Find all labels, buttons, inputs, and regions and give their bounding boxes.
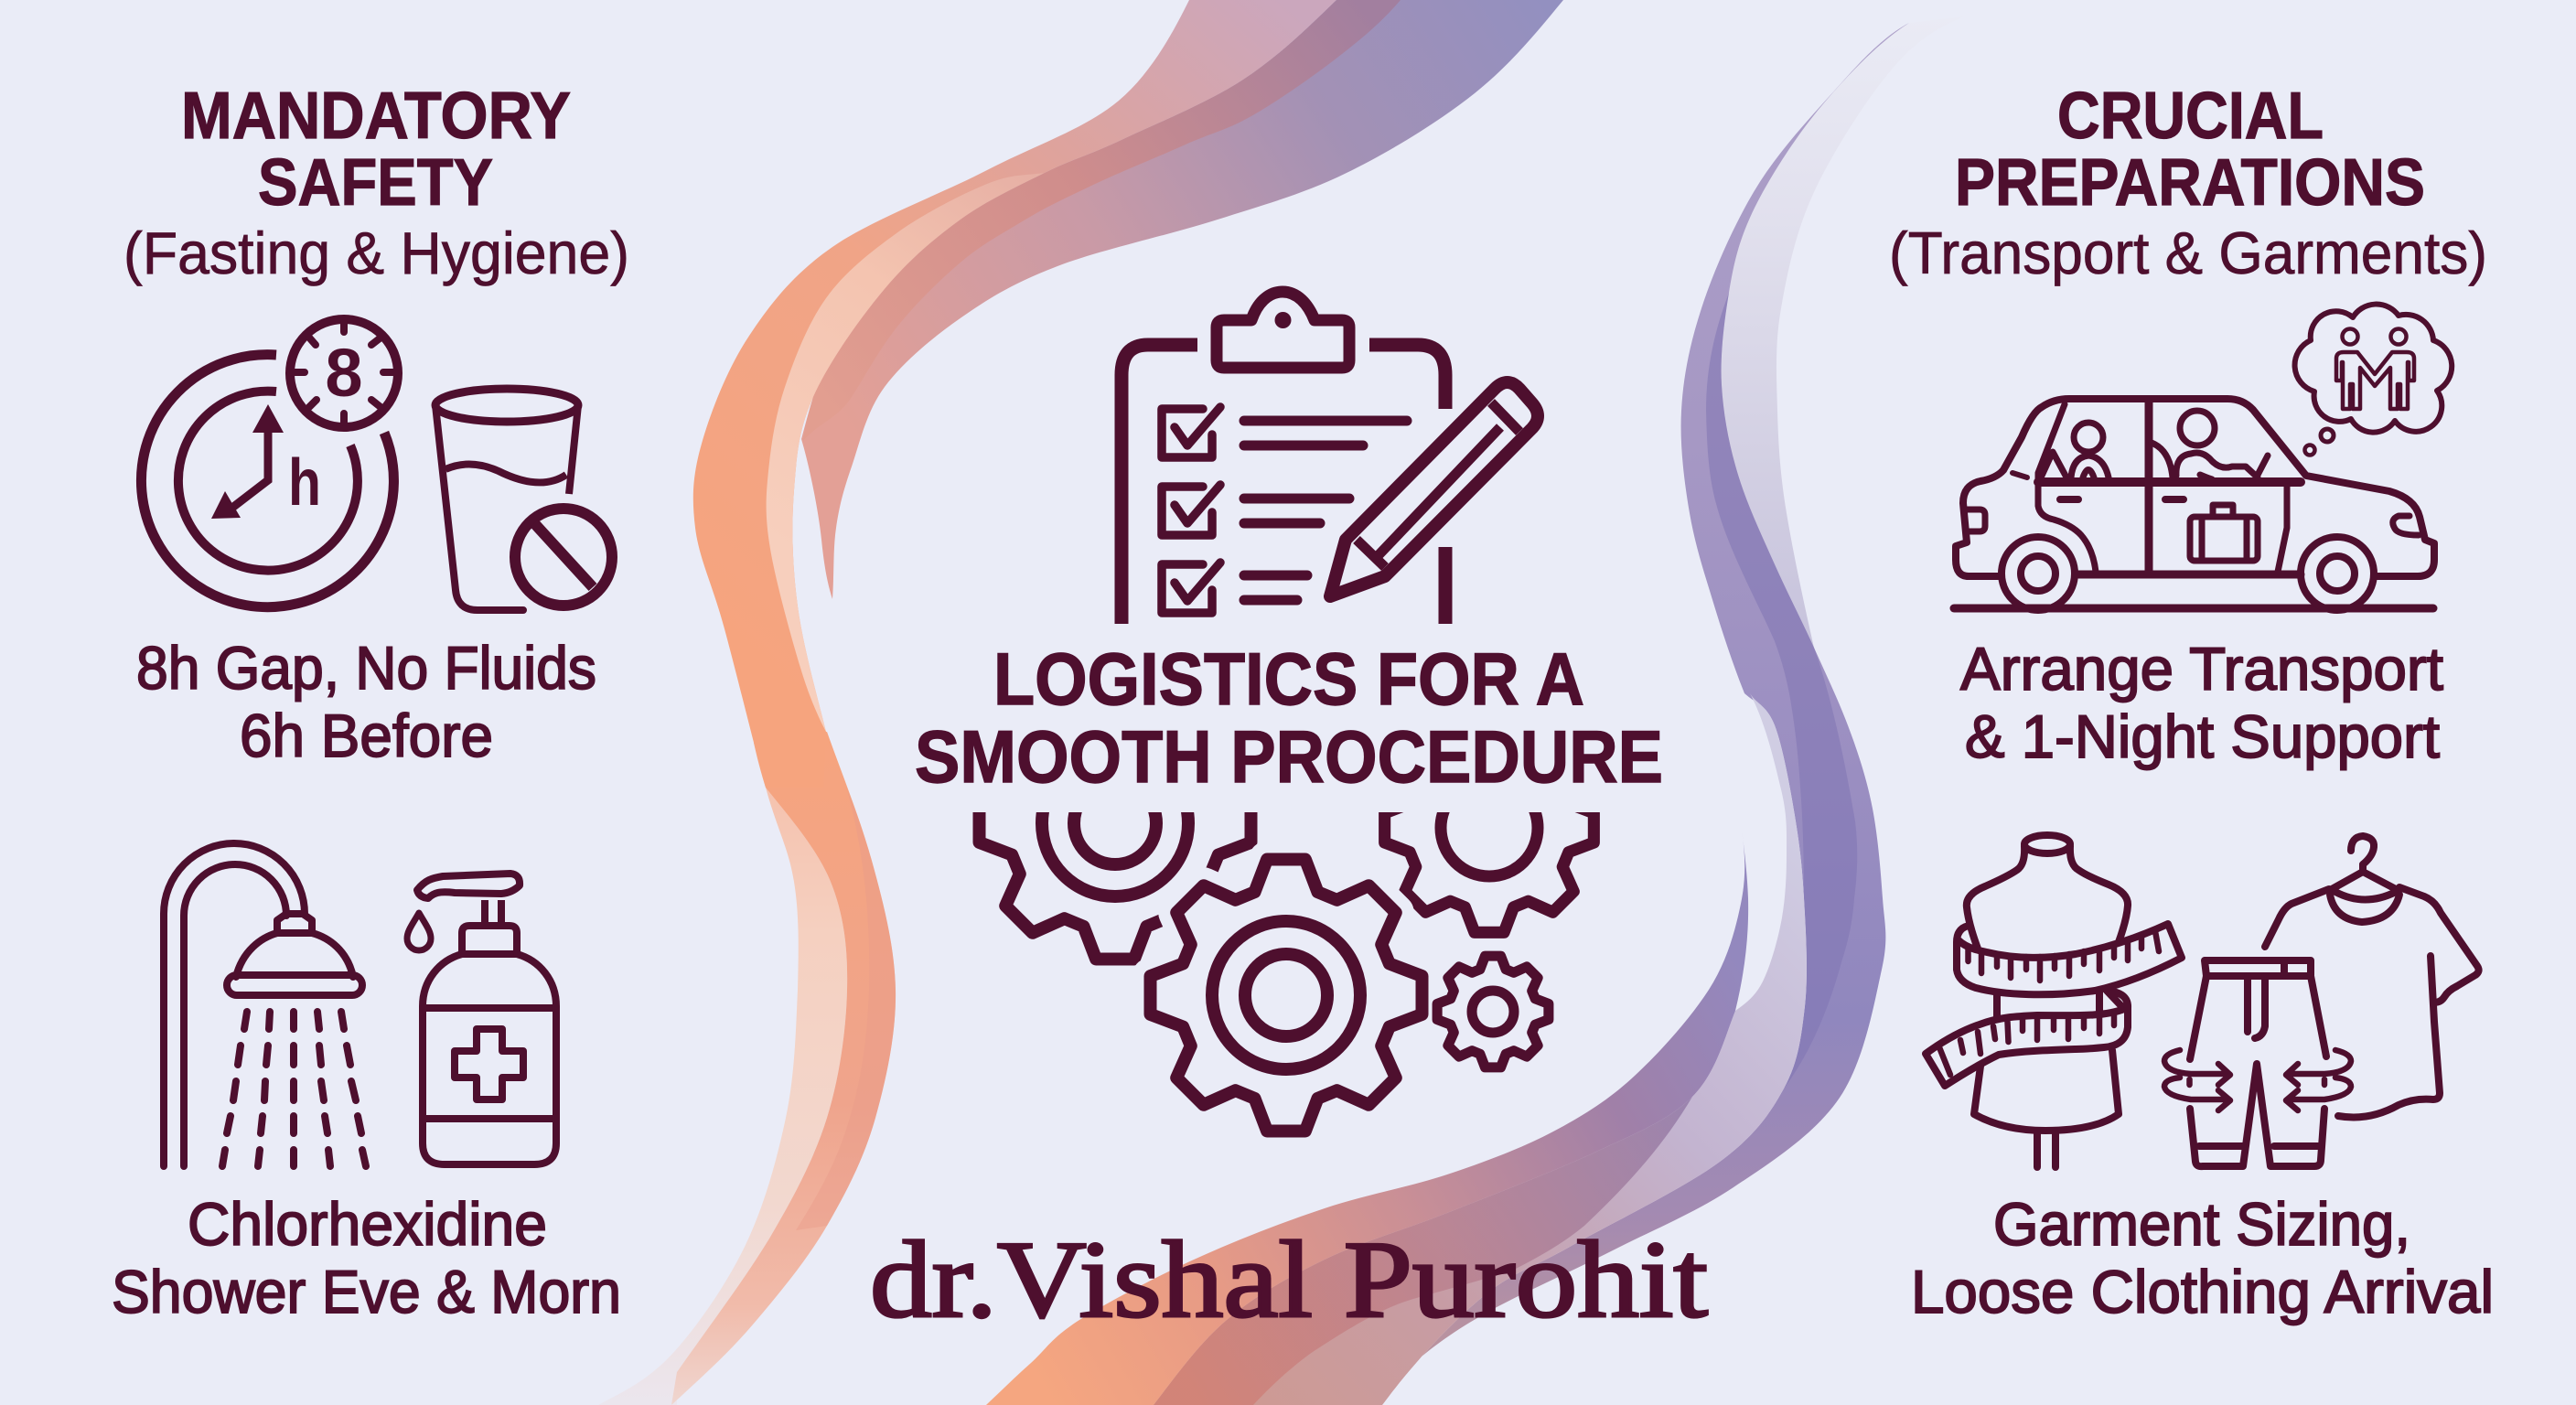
- label: transport: & 1-Night Support: [1965, 702, 2440, 770]
- thought bubble with two people: [2295, 305, 2452, 456]
- heading: crucial preparations: (Transport & Garments): [1889, 220, 2487, 286]
- label: garments: Garment Sizing,: [1993, 1190, 2410, 1258]
- passengers: [2042, 411, 2268, 479]
- author name: dr.Vishal Purohit: [870, 1218, 1708, 1340]
- heading: mandatory safety: MANDATORY: [181, 80, 571, 153]
- title: SMOOTH PROCEDURE: [915, 716, 1663, 799]
- label: fasting: 6h Before: [240, 702, 493, 769]
- heading: mandatory safety: (Fasting & Hygiene): [123, 220, 629, 286]
- title: [915, 638, 1663, 799]
- label: shower: [112, 1190, 621, 1325]
- ribbon: purple S-curve flowing down the right and into the bottom centre: [986, 16, 1964, 1405]
- icon: clock with eight hour dial: 8: [325, 335, 363, 411]
- icon: loose trousers with arrows: [2164, 960, 2351, 1166]
- icon: gears: [973, 812, 1600, 1138]
- icon: clipboard checklist with pencil: [1122, 292, 1538, 624]
- icon: clock with eight hour dial: h: [288, 446, 321, 520]
- icon: chlorhexidine pump bottle: [407, 874, 556, 1164]
- icon: t-shirt on hanger: [2265, 836, 2479, 1118]
- icon: clock with eight hour dial: [141, 319, 398, 607]
- label: fasting: 8h Gap, No Fluids: [136, 634, 596, 702]
- panel: centre: [870, 292, 1708, 1340]
- suitcase: [2190, 505, 2258, 561]
- panel: crucial preparations: [1889, 80, 2494, 1325]
- label: transport: [1960, 635, 2443, 770]
- pencil: [1330, 382, 1538, 596]
- label: fasting: [136, 634, 596, 769]
- icon: car with luggage and thought bubble: [1954, 305, 2452, 610]
- icon: shower: [164, 843, 366, 1166]
- label: shower: Shower Eve & Morn: [112, 1258, 621, 1325]
- checklist items: [1162, 407, 1407, 613]
- heading: mandatory safety: SAFETY: [258, 146, 493, 220]
- icon: glass of water with prohibition sign: [435, 389, 612, 610]
- label: garments: [1911, 1190, 2494, 1325]
- heading: crucial preparations: PREPARATIONS: [1955, 146, 2425, 220]
- panel: mandatory safety: [112, 80, 629, 1325]
- label: transport: Arrange Transport: [1960, 635, 2443, 702]
- ribbon: orange and coral flowing from top centre down the left: [598, 0, 1563, 1405]
- heading: mandatory safety: [123, 80, 629, 286]
- icon: dress form with measuring tape: [1926, 835, 2182, 1167]
- heading: crucial preparations: [1889, 80, 2487, 286]
- heading: crucial preparations: CRUCIAL: [2057, 80, 2324, 153]
- title: LOGISTICS FOR A: [993, 638, 1584, 721]
- label: garments: Loose Clothing Arrival: [1911, 1258, 2494, 1325]
- label: shower: Chlorhexidine: [188, 1190, 547, 1258]
